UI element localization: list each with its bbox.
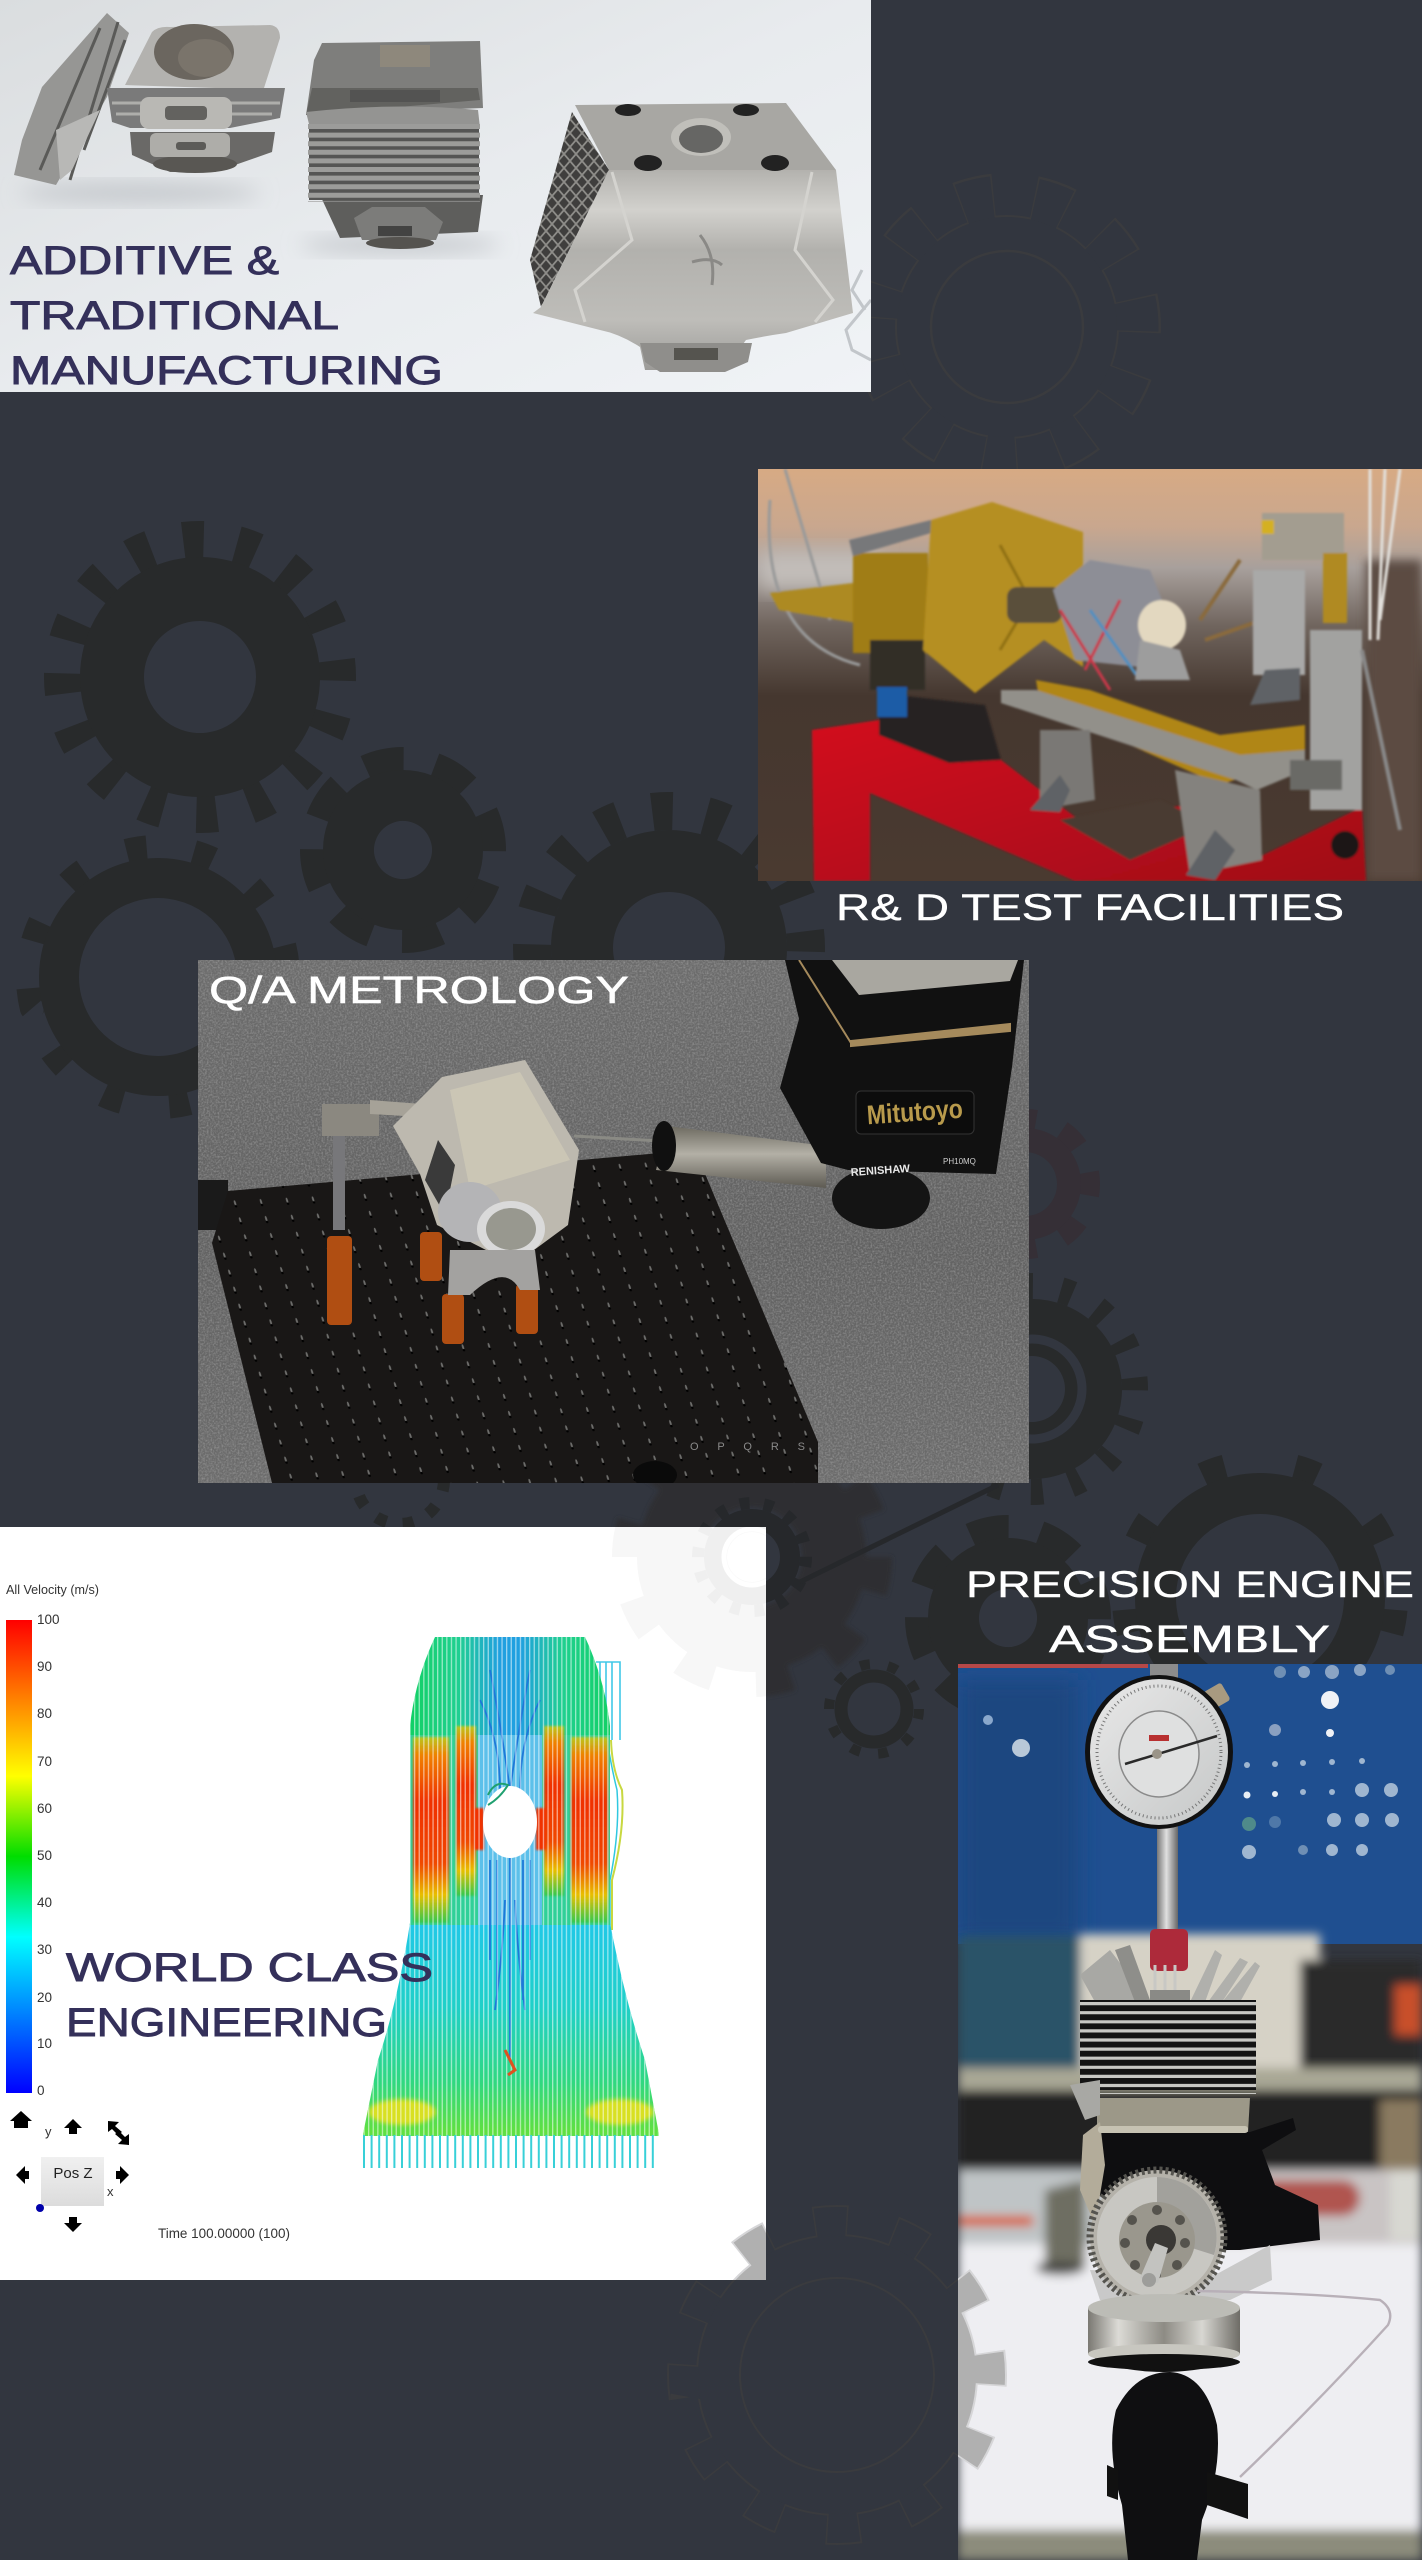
- scale labels: 90: [37, 1659, 52, 1674]
- dial gauge: [1085, 1675, 1233, 1829]
- blue centre lines: [480, 1670, 540, 2060]
- probe rod: [333, 1130, 345, 1230]
- dial gauge top stem: [1150, 1664, 1178, 1678]
- shadow of second cylinder: [300, 236, 500, 254]
- title: all velocity: All Velocity (m/s): [6, 1583, 99, 1597]
- gear: ringed gear right of metrology: [919, 1276, 1145, 1502]
- label: R&D test facilities: R& D TEST FACILITIES: [836, 887, 1344, 928]
- wire: [1197, 2291, 1390, 2477]
- heading: additive and traditional manufacturing: MANUFACTURING: [10, 349, 443, 393]
- hole edge curls: [488, 1784, 508, 1805]
- view controls: [10, 2111, 129, 2232]
- breadboard plate: [212, 1150, 818, 1483]
- dial gauge knob: [1203, 1682, 1231, 1710]
- Renishaw label: RENISHAW: [850, 1163, 911, 1179]
- opening in stand: [1060, 806, 1186, 862]
- gear: behind metrology panel: [516, 795, 822, 1101]
- down arrow: [64, 2217, 82, 2232]
- panel: R&D test facilities photo: [758, 469, 1422, 881]
- fixture block and bar: [322, 1100, 475, 1136]
- legs: [1040, 730, 1095, 810]
- gear: diagonal belt line: [800, 1485, 998, 1582]
- cylinder one: tilted fins: [14, 13, 129, 185]
- pale gear watermark: [627, 1432, 877, 1682]
- aluminium tray: [1001, 690, 1305, 790]
- heading: precision engine assembly: [966, 1564, 1414, 1661]
- cylinder two: [306, 41, 483, 249]
- cylinder head fins: [1080, 1945, 1260, 2002]
- ball mount: [1112, 2372, 1218, 2560]
- carpet background: [198, 960, 1029, 1483]
- scale labels: 10: [37, 2036, 52, 2051]
- side plate: [1080, 2122, 1105, 2225]
- scale labels: 80: [37, 1706, 52, 1721]
- heading: additive and traditional manufacturing: ADDITIVE &: [10, 239, 279, 283]
- blue box: [877, 687, 907, 717]
- machined housing: [393, 1060, 579, 1295]
- axis z dot: [36, 2204, 44, 2212]
- plate holes: [212, 1150, 818, 1483]
- hub: [1007, 587, 1062, 623]
- model label: PH10MQ: [943, 1157, 976, 1166]
- heading: precision engine assembly: PRECISION ENGINE: [966, 1564, 1414, 1605]
- diagonal arrows: [108, 2121, 129, 2145]
- axis x: x: [107, 2184, 114, 2199]
- black mount: [879, 693, 1001, 763]
- bottom white fade: [360, 2136, 662, 2170]
- hanging wire: [1362, 650, 1400, 830]
- mount handle: [1107, 2465, 1248, 2519]
- scale labels: 100: [37, 1612, 60, 1627]
- gear: faint outline bottom: [664, 2202, 1010, 2548]
- plate knob: [633, 1461, 677, 1489]
- heading: world class engineering: [66, 1946, 433, 2045]
- wall dots: [983, 1664, 1399, 1859]
- heading: additive and traditional manufacturing: TRADITIONAL: [10, 294, 339, 338]
- yellow side patches: [368, 2099, 436, 2125]
- gear: medium centre: [284, 731, 522, 969]
- scale labels: 50: [37, 1848, 52, 1863]
- gear: medium behind assembly title: [889, 1499, 1127, 1737]
- grey gear corner: [664, 2202, 1010, 2548]
- gear: small gear with ring: [698, 1503, 806, 1611]
- wall background: [758, 469, 1422, 881]
- heading: world class engineering: ENGINEERING: [66, 2001, 387, 2045]
- wiring: [1200, 560, 1262, 640]
- time label: Time 100.00000 (100): [158, 2225, 290, 2241]
- black engine mount: [1090, 2118, 1320, 2250]
- heading: additive and traditional manufacturing: [9, 246, 440, 385]
- faint gear outline over photo: [846, 270, 871, 360]
- white ball: [1138, 600, 1186, 650]
- grey gear watermark: [664, 2202, 1010, 2548]
- head top block: [832, 960, 1018, 995]
- probe disk: [652, 1121, 676, 1171]
- colour scale bar: [6, 1620, 32, 2093]
- axis y: y: [45, 2124, 52, 2139]
- dial gauge stem: [1157, 1825, 1178, 1933]
- cylinder neck: [1097, 2098, 1250, 2132]
- probe cylinder: [656, 1126, 826, 1188]
- gear: blurred wide gear behind CFD panel: [627, 1432, 877, 1682]
- white cables: [1370, 469, 1400, 640]
- scale labels: 40: [37, 1895, 52, 1910]
- engine cluster: [1053, 560, 1170, 667]
- cylinder one: body: [107, 24, 285, 173]
- side bulge streamlines: [611, 1740, 623, 1930]
- yellow frame: [853, 553, 928, 653]
- left arrow: [16, 2166, 29, 2184]
- yellow arm: [769, 582, 854, 624]
- scale labels: 0: [37, 2083, 45, 2098]
- streamline tails: [363, 2135, 659, 2169]
- central hole: [483, 1786, 537, 1858]
- blurred workshop background: [958, 1934, 1422, 2560]
- blue wall: [958, 1664, 1422, 1944]
- white background: [0, 1527, 766, 2280]
- scale labels: [37, 1612, 60, 2098]
- up arrow: [64, 2119, 82, 2134]
- heading: precision engine assembly: ASSEMBLY: [1049, 1619, 1330, 1661]
- centre speck: [505, 2050, 515, 2075]
- yellow plate: [923, 502, 1083, 693]
- dark right wall: [1366, 560, 1422, 881]
- right arrow: [116, 2166, 129, 2184]
- panel: additive and traditional manufacturing: [0, 0, 871, 393]
- side box streamlines: [596, 1662, 620, 1740]
- right columns: [1253, 570, 1305, 675]
- pulley: [1090, 2170, 1224, 2304]
- gear: large upper right: [1093, 1431, 1422, 1765]
- grey top bar: [849, 520, 931, 556]
- panel: Q/A metrology photo: [198, 960, 1029, 1489]
- red stand: [812, 720, 1366, 881]
- plate letters: O P Q R S: [690, 1441, 805, 1453]
- lower flare colours: [360, 1920, 662, 2170]
- Mitutoyo badge: Mitutoyo: [866, 1094, 964, 1130]
- hot bands: [413, 1726, 608, 1923]
- gear: faint outline top right: [853, 173, 1161, 481]
- silver wall highlight: [758, 550, 878, 590]
- rig photo: [769, 469, 1400, 881]
- upper dome colours: [405, 1637, 615, 1747]
- scale labels: 30: [37, 1942, 52, 1957]
- gear: wide ring left: [0, 819, 316, 1135]
- gear: faint brownish right of metrology: [950, 1109, 1100, 1259]
- red collar: [1150, 1929, 1188, 1971]
- wall shading: [958, 1680, 1078, 1940]
- measuring head ball: [832, 1167, 930, 1229]
- shadow of first cylinder: [20, 183, 260, 203]
- orange posts: [327, 1232, 538, 1344]
- lower fin block: [1070, 2080, 1100, 2120]
- probe stem: [574, 1136, 660, 1141]
- neck plate: [1098, 2126, 1248, 2133]
- gold tray: [1036, 680, 1305, 785]
- base disk: [1088, 2294, 1240, 2372]
- home arrow: [10, 2111, 32, 2128]
- scale labels: 20: [37, 1990, 52, 2005]
- CFD streamline plot: [360, 1637, 662, 2170]
- view label: Pos Z: [53, 2165, 93, 2182]
- carpet speckle: [198, 960, 1029, 1483]
- gear: large top-left: [47, 524, 353, 830]
- grey cable: [769, 469, 860, 665]
- gear: small gear below band: [829, 1664, 919, 1754]
- panel: precision engine assembly photo: [664, 1664, 1422, 2560]
- heading: Q/A metrology: Q/A METROLOGY: [209, 970, 629, 1012]
- clamp left: [198, 1180, 228, 1230]
- panel: world class engineering CFD: [0, 1432, 1010, 2548]
- gear: fragments under metrology panel: [356, 1436, 444, 1524]
- centre flow: [405, 1735, 615, 1925]
- red strip: [958, 1664, 1148, 1668]
- heading: world class engineering: WORLD CLASS: [66, 1946, 433, 1990]
- view cube: [41, 2157, 104, 2206]
- cylinder fins: [1080, 2000, 1256, 2094]
- scale labels: 70: [37, 1754, 52, 1769]
- streak overlay: [360, 1637, 662, 2168]
- cylinder three: additive part: [530, 103, 853, 372]
- scale labels: 60: [37, 1801, 52, 1816]
- base plate shelf: [1090, 2245, 1272, 2300]
- measuring head: [780, 960, 1024, 1174]
- photo background: [0, 0, 871, 392]
- gold trim: [799, 960, 1010, 1046]
